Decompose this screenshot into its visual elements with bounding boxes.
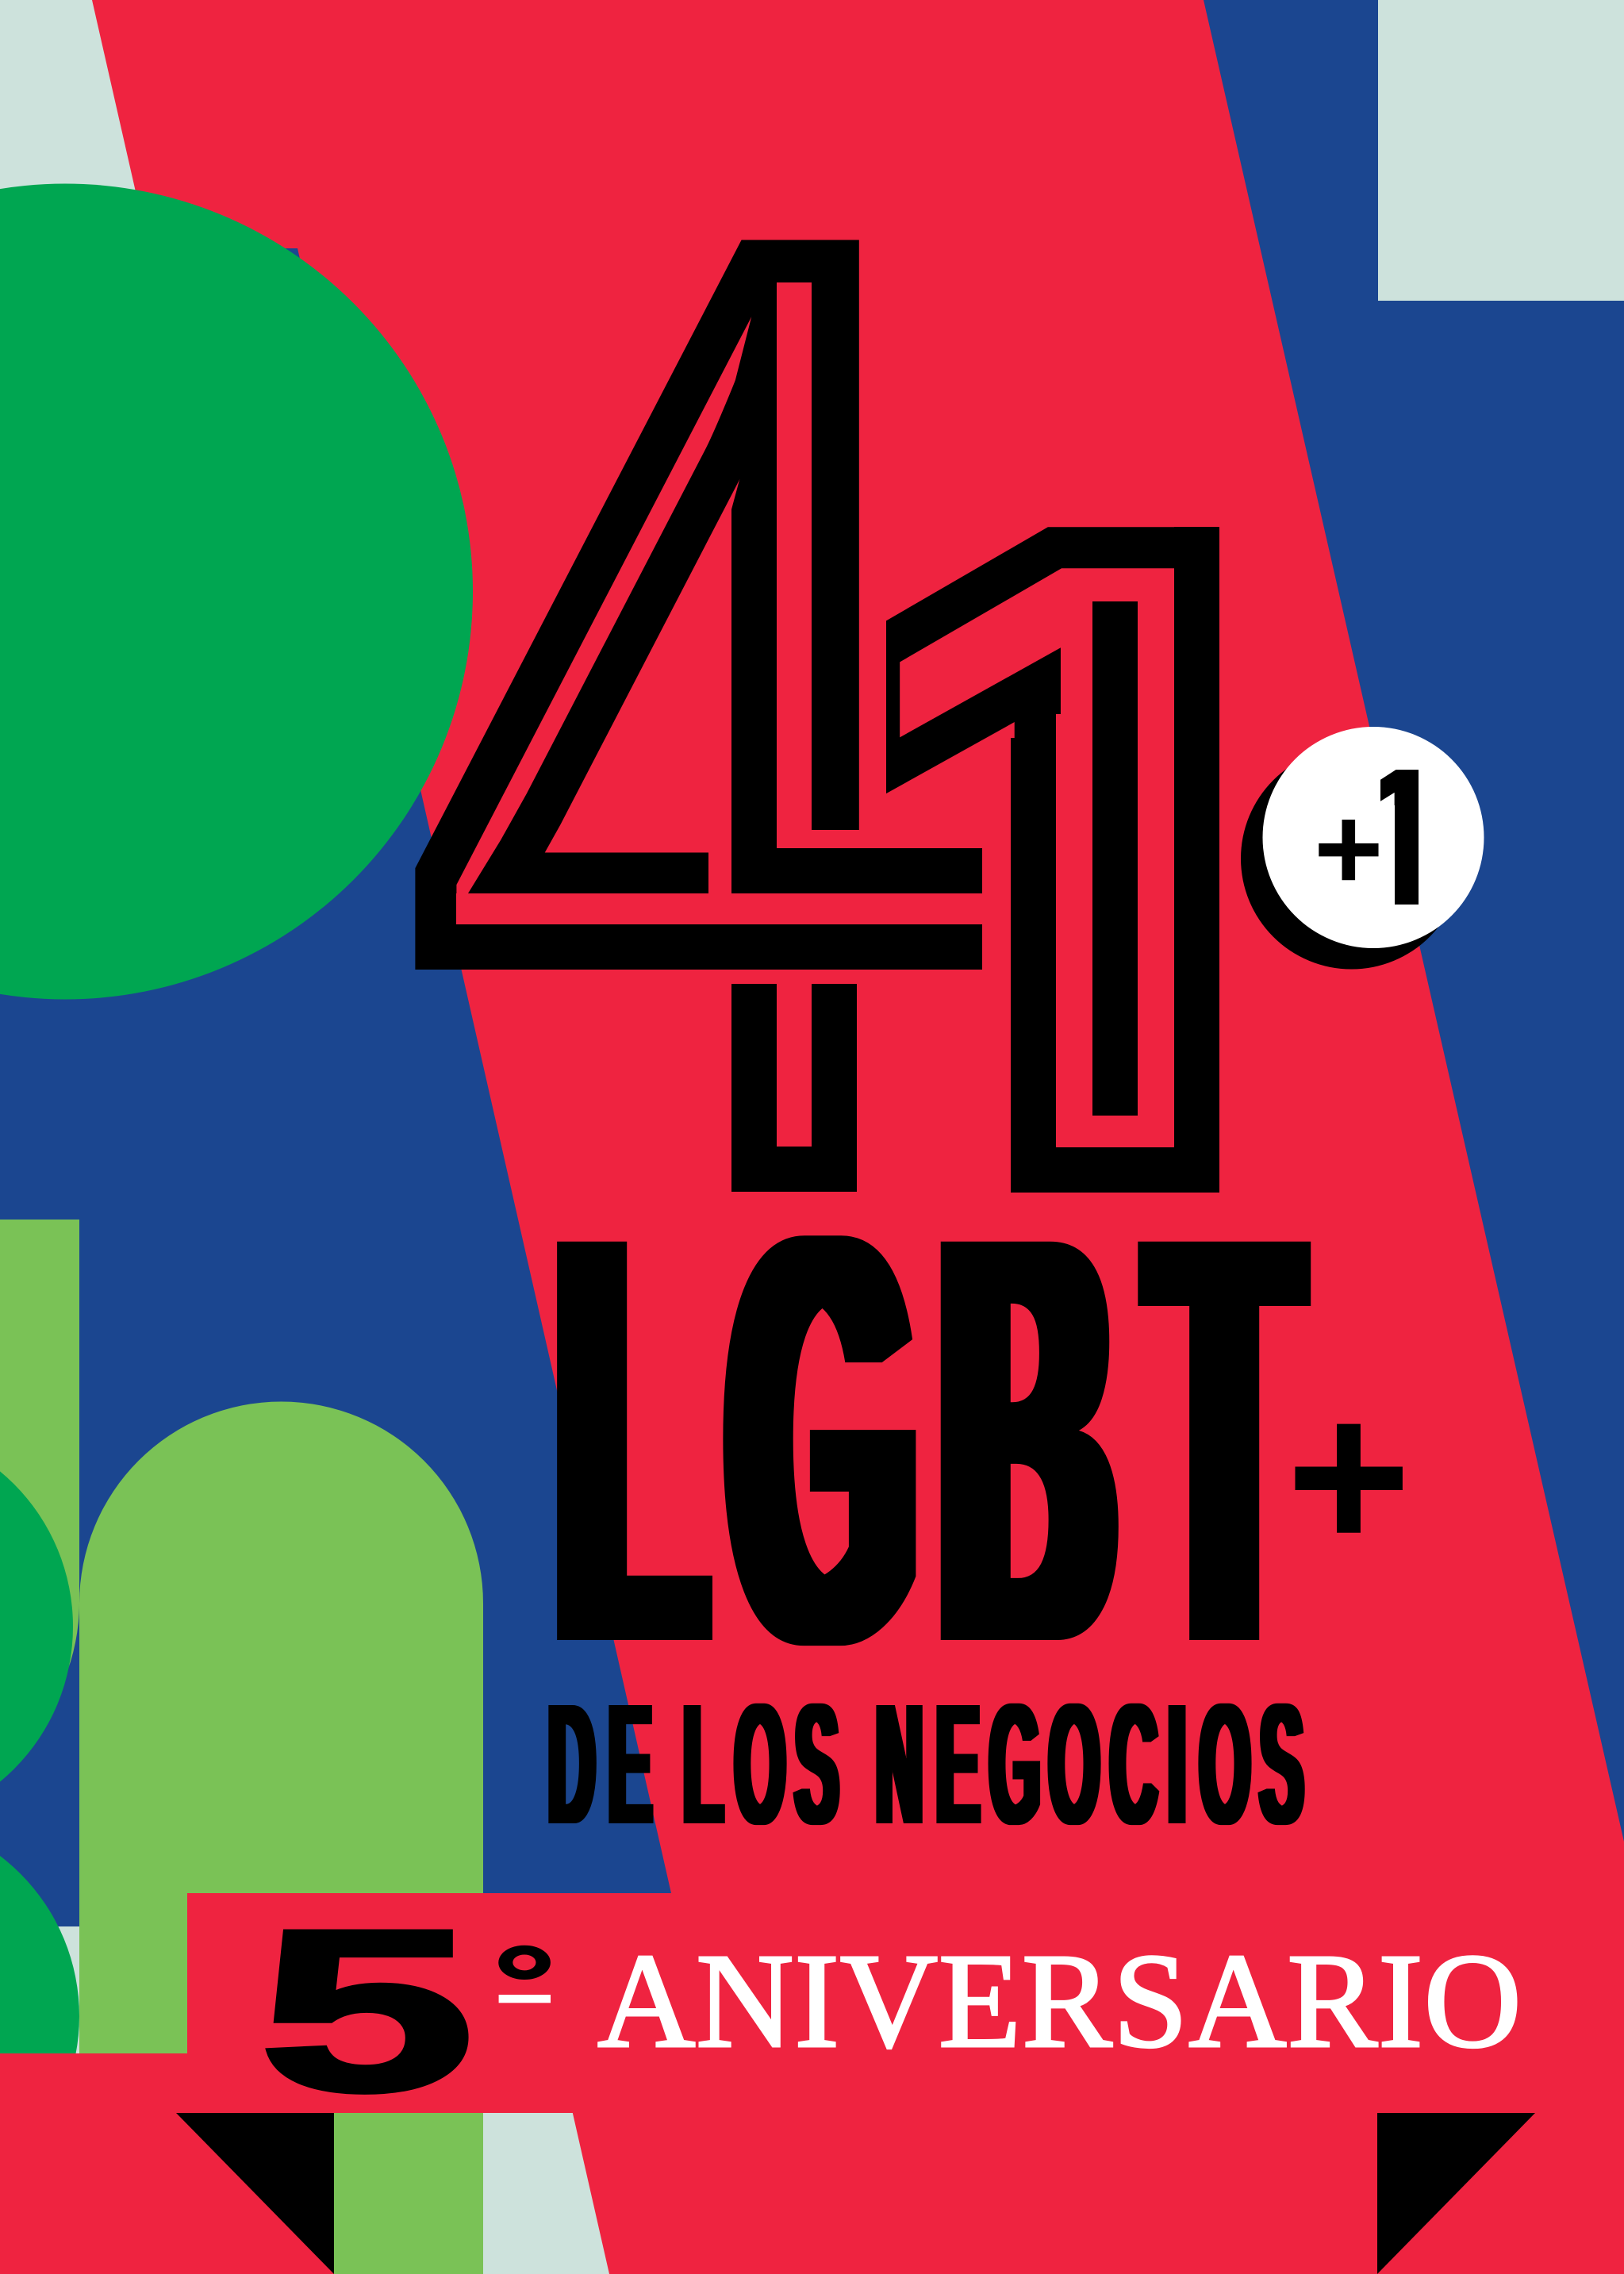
badge disc (1263, 727, 1484, 948)
shape: left lime column (0, 1220, 79, 1804)
shape: lime arch (79, 1401, 483, 2274)
badge: +1 circle (1241, 727, 1484, 970)
shape: lower-left red block (0, 2053, 334, 2274)
anniversary label: ANIVERSARIO (597, 1926, 1522, 2076)
shape: anniversary red band (187, 1893, 822, 2113)
heading number: 41 inline numerals (415, 240, 1219, 1193)
shape: lower small green circle (0, 1815, 79, 2218)
badge shadow (1241, 747, 1462, 970)
shape: large green circle (0, 184, 473, 1000)
numeral 1 (886, 527, 1219, 1193)
shape: lower-left cream strip (0, 1926, 79, 2061)
shape: right black triangle (1377, 2113, 1535, 2274)
background: right blue panel (1111, 0, 1624, 2274)
anniversary numeral: 5° (258, 1882, 556, 2139)
numeral 4 (415, 240, 982, 1192)
shape: upper small green circle (0, 1425, 73, 1828)
background: left blue shape (0, 248, 671, 1926)
shape: left black triangle (176, 2113, 334, 2274)
degree mark: ° (493, 1925, 556, 2043)
numeral 4: 4 (408, 0, 971, 1452)
badge plus: + (1314, 782, 1384, 915)
subtitle: de los negocios: DE LOS NEGOCIOS (548, 1668, 1303, 1860)
title letters: LGBT (560, 1116, 1295, 1763)
numeral 5: 5 (258, 1882, 475, 2139)
badge one: 1 (1349, 728, 1457, 947)
title plus: + (1286, 1357, 1411, 1596)
degree underline (499, 1995, 551, 2003)
background: top-right cream block (1378, 0, 1624, 301)
numeral 1: 1 (824, 371, 1366, 1344)
title: LGBT+ (560, 1116, 1411, 1763)
